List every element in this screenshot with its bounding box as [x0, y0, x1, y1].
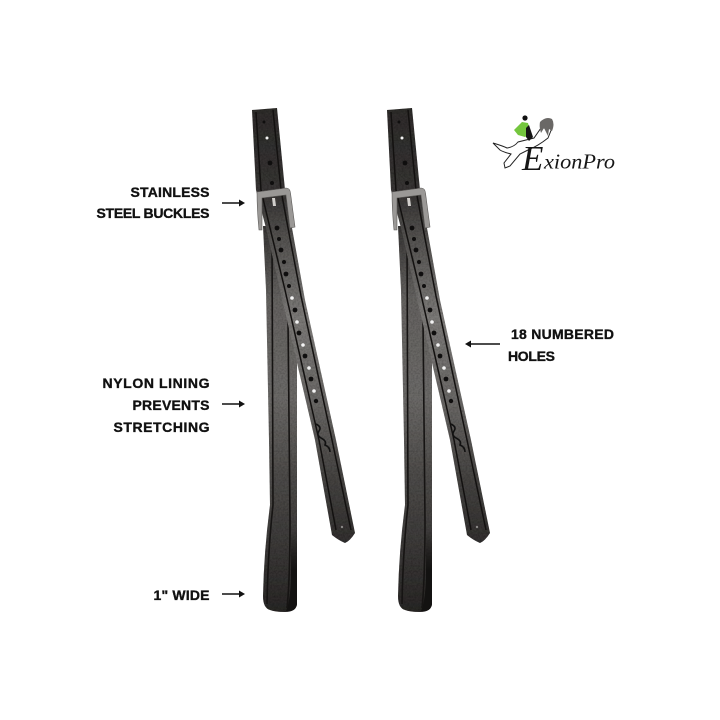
label: numbered holes: HOLES: [508, 348, 555, 364]
label: nylon lining: [102, 375, 210, 435]
label: nylon lining: NYLON LINING: [102, 375, 210, 391]
icon: horse and rider: [493, 115, 554, 168]
wordmark: xionPro: [543, 150, 615, 174]
arrow: nylon lining: [222, 400, 245, 408]
arrow: holes: [465, 340, 500, 348]
label: stainless steel buckles: STEEL BUCKLES: [96, 205, 210, 221]
arrow: buckles: [222, 200, 245, 206]
label: numbered holes: [508, 326, 614, 364]
label: nylon lining: STRETCHING: [114, 419, 210, 435]
label: one inch wide: 1" WIDE: [154, 587, 210, 603]
strap: right stirrup leather: [387, 108, 490, 612]
wordmark: E: [521, 139, 543, 178]
wordmark: [521, 139, 615, 178]
label: stainless steel buckles: [96, 184, 210, 221]
logo: ExionPro: [493, 115, 615, 178]
label: numbered holes: 18 NUMBERED: [511, 326, 614, 342]
arrow: width: [222, 590, 245, 598]
label: stainless steel buckles: STAINLESS: [130, 184, 210, 200]
strap: left stirrup leather: [252, 108, 355, 612]
label: nylon lining: PREVENTS: [132, 397, 210, 413]
